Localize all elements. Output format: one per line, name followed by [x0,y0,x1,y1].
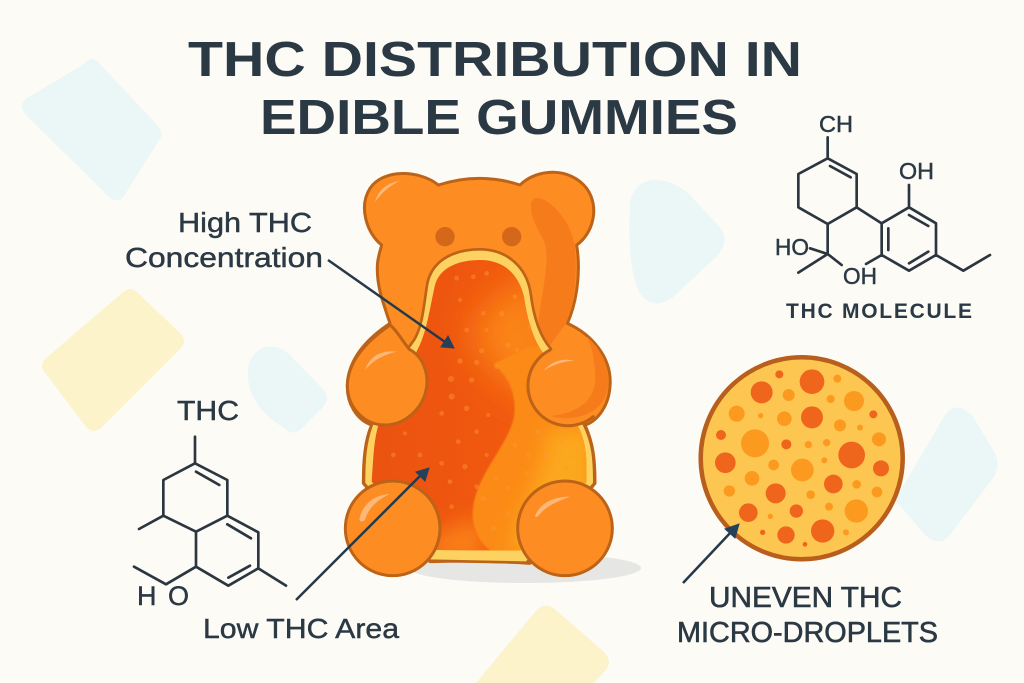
label: high THC concentration: High THC [178,207,312,238]
molecule caption: THC MOLECULE [786,300,972,323]
light patch [510,427,593,553]
gummy bear [345,172,612,576]
right hand [528,337,608,426]
title: EDIBLE GUMMIES [260,91,738,145]
title: THC DISTRIBUTION IN [188,33,802,87]
molecule atom labels: CH [819,111,853,137]
right foot [518,481,612,576]
label: uneven THC micro-droplets: UNEVEN THC [709,582,902,614]
THC structure diagram [134,395,286,611]
left hand [347,325,427,425]
ground shadow [409,553,641,583]
label: uneven THC micro-droplets [677,582,938,649]
speckles [391,271,573,531]
arrow: low THC [296,468,429,600]
bottom orange glow [436,514,488,550]
title [188,33,802,145]
bear body [347,172,610,563]
structure labels: O [168,581,189,611]
label: high THC concentration [125,207,323,273]
structure labels [137,395,239,611]
arrow: droplets [683,524,739,583]
belly colour field [372,260,587,551]
structure labels: THC [177,395,239,426]
right eye [502,227,521,246]
darker stripe on right side [531,198,576,350]
structure labels: H [137,581,156,611]
light droplets [724,375,886,535]
structure bonds [134,437,286,586]
micro-droplet circle [701,357,903,559]
left eye [435,227,455,246]
molecule atom labels [775,111,934,289]
THC molecule diagram [775,111,990,323]
label: uneven THC micro-droplets: MICRO-DROPLETS [677,617,938,649]
dark droplets [715,369,889,547]
label: low THC area: Low THC Area [203,613,399,644]
low-concentration wave [473,347,597,553]
left foot [345,481,440,576]
label: high THC concentration: Concentration [125,242,323,273]
belly yellow rim [364,249,594,563]
molecule atom labels: HO [775,234,809,260]
high-concentration base [372,260,587,550]
arrow: high THC [328,260,454,348]
molecule bonds [798,137,990,273]
molecule atom labels: OH [899,158,934,184]
upper orange glow [462,274,539,399]
molecule atom labels: OH [843,263,877,289]
ear highlight [375,181,400,202]
